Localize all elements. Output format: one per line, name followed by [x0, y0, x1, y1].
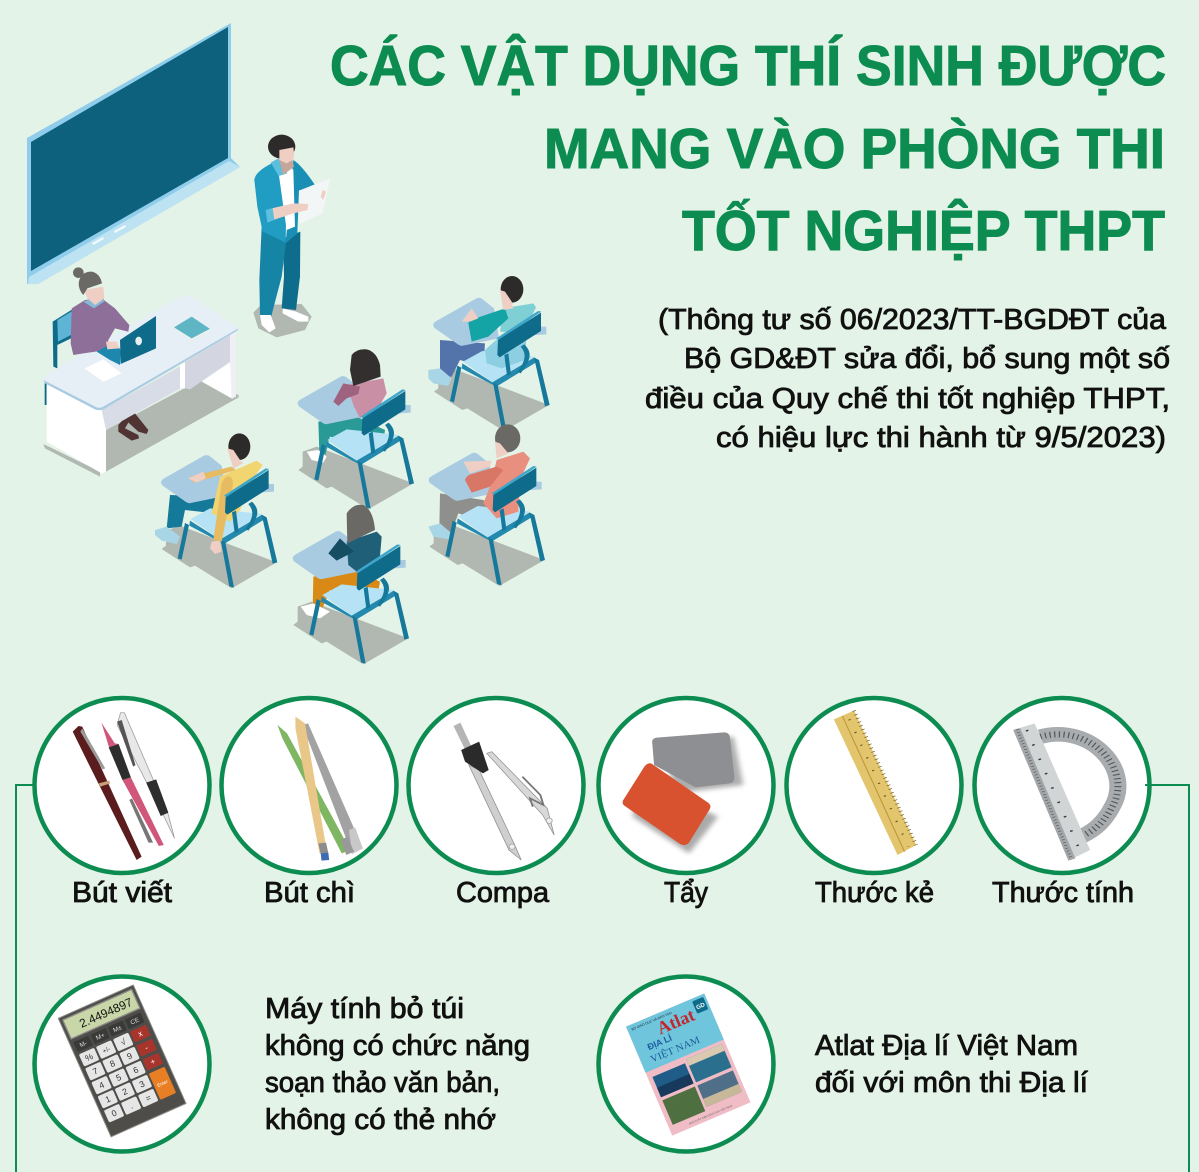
subtitle: legal basis [645, 304, 1170, 454]
subtitle: legal basis: có hiệu lực thi hành từ 9/5/2023) [716, 422, 1166, 454]
invigilator seated at desk with laptop [43, 267, 239, 477]
item: Atlat book: NHÀ XUẤT BẢN GIÁO DỤC VIỆT NAM [688, 1103, 733, 1126]
proctor standing with paper [253, 135, 330, 337]
item: calculator: +/- [102, 1046, 112, 1055]
item: calculator: M± [112, 1024, 123, 1034]
student: lower left [155, 433, 277, 588]
item: calculator: 5 [114, 1072, 123, 1083]
illustration: exam classroom [27, 23, 550, 664]
text: calculator condition [265, 993, 530, 1136]
text: Atlat condition: Atlat Địa lí Việt Nam [815, 1030, 1078, 1062]
item: calculator: 2.4494897 [77, 995, 135, 1031]
item: calculator: 0 [110, 1108, 118, 1119]
item: Atlat book: GD [696, 1002, 707, 1011]
item: calculator: = [144, 1092, 153, 1104]
item: calculator: 2 [121, 1086, 129, 1097]
label: Compa: Compa [456, 877, 550, 909]
label: Bút chì: Bút chì [264, 877, 355, 909]
text: Atlat condition [815, 1030, 1088, 1099]
subtitle: legal basis: Bộ GD&ĐT sửa đổi, bổ sung một số [684, 343, 1170, 375]
item: calculator: 6 [131, 1064, 140, 1076]
item: compass [408, 698, 584, 873]
item: calculator: M- [79, 1040, 88, 1049]
student: centre [298, 349, 414, 509]
item: calculator: 7 [91, 1066, 100, 1077]
item: Atlat book: ĐỊA LÍ [646, 1032, 674, 1052]
subtitle: legal basis: (Thông tư số 06/2023/TT-BGDĐT của [658, 304, 1167, 336]
item: calculator: 4 [97, 1080, 106, 1091]
student: top right [428, 276, 550, 431]
item: calculator: % [84, 1051, 95, 1063]
text: calculator condition: không có chức năng [265, 1030, 530, 1062]
item: Atlat book: BỘ GIÁO DỤC VÀ ĐÀO TẠO [630, 1010, 673, 1032]
connector frame lines [16, 785, 1189, 1172]
item: calculator: 8 [108, 1058, 117, 1069]
title: MANG VÀO PHÒNG THI [544, 117, 1165, 181]
item: calculator: x [137, 1029, 144, 1039]
item: calculator: 9 [125, 1050, 134, 1062]
item: calculator: CE [130, 1017, 140, 1027]
item: Atlat book: VIỆT NAM [649, 1034, 702, 1065]
label: Thước tính: Thước tính [992, 877, 1134, 909]
item: erasers [598, 698, 774, 873]
text: Atlat condition: đối với môn thi Địa lí [815, 1067, 1088, 1099]
title [330, 33, 1166, 263]
text: calculator condition: Máy tính bỏ túi [265, 993, 464, 1025]
subtitle: legal basis: điều của Quy chế thi tốt nghiệp THPT, [645, 383, 1170, 415]
chalkboard [27, 23, 240, 284]
item: calculator: √ [119, 1036, 128, 1048]
title: CÁC VẬT DỤNG THÍ SINH ĐƯỢC [330, 33, 1166, 98]
label: Thước kẻ: Thước kẻ [815, 877, 934, 909]
item: Atlat book [598, 976, 774, 1152]
student: lower right [428, 424, 545, 586]
text: calculator condition: không có thẻ nhớ [265, 1104, 496, 1136]
item: calculator [34, 976, 210, 1152]
item: calculator: . [128, 1101, 134, 1111]
student: bottom centre [293, 505, 409, 664]
item: ruler [786, 698, 962, 873]
item: calculator: 3 [138, 1078, 146, 1090]
item: calculator: - [144, 1043, 150, 1052]
text: calculator condition: soạn thảo văn bản, [265, 1067, 500, 1099]
right connector stub [1145, 784, 1152, 786]
item: pencils [222, 698, 396, 873]
label: Tẩy: Tẩy [664, 877, 708, 909]
item: Atlat book: Atlat [654, 1005, 698, 1038]
item: calculator: M+ [95, 1032, 106, 1042]
item: calculator: 1 [104, 1094, 112, 1105]
item: ruler and protractor [974, 698, 1150, 873]
item: calculator: Enter [156, 1079, 169, 1088]
label: Bút viết: Bút viết [72, 877, 172, 909]
item: pens [34, 698, 210, 873]
student desks and chairs [155, 276, 550, 664]
title: TỐT NGHIỆP THPT [682, 198, 1165, 263]
item: calculator: + [149, 1057, 157, 1067]
